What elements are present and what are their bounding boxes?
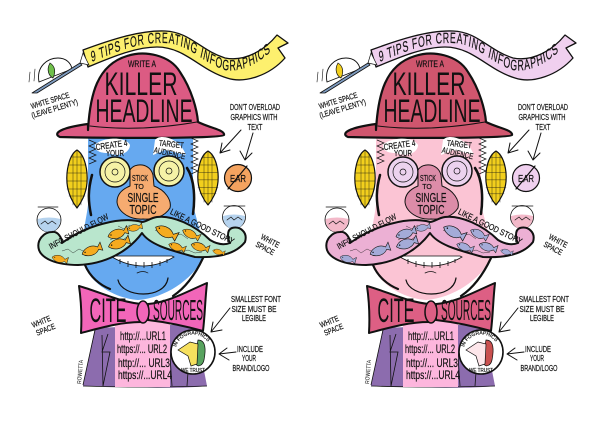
icon: flying saucer with alien — [29, 53, 89, 93]
note: include your brand/logo: BRAND/LOGO — [232, 363, 270, 373]
source URLs on shirt: http://... URL3 — [406, 356, 458, 370]
character: left full-colour version — [28, 30, 289, 388]
note: white space left: WHITE — [318, 314, 340, 330]
source URLs on shirt: https://...URL4 — [118, 368, 172, 382]
jacket — [371, 320, 495, 388]
eyebrow labels: YOUR — [394, 149, 412, 158]
note: include your brand/logo: YOUR — [242, 353, 256, 363]
note: white space left — [318, 314, 345, 338]
note: smallest font size: LEGIBLE — [242, 313, 266, 323]
source URLs on shirt: http://...URL1 — [120, 329, 166, 343]
moustache with fish — [326, 206, 534, 265]
hat text: write a killer headline: WRITE A — [128, 59, 156, 69]
note: include your brand/logo: INCLUDE — [525, 344, 551, 354]
arrow to badge — [211, 308, 230, 332]
nose: stick to single topic: STICK — [420, 174, 436, 183]
note: smallest font size: SIZE MUST BE — [232, 304, 277, 314]
source URLs on shirt: http://...URL1 — [408, 329, 454, 343]
source URLs on shirt: https://...URL4 — [406, 368, 460, 382]
arrow to logo — [219, 348, 236, 360]
badge: in infographics we trust: WE TRUST — [181, 368, 206, 374]
note: white space left: SPACE — [35, 322, 57, 338]
note: don't overload graphics with text — [230, 102, 280, 132]
crossed-out ear icon — [512, 164, 540, 192]
source URLs on shirt — [405, 329, 460, 382]
moustache with goldfish — [38, 206, 246, 265]
bow tie: cite sources — [367, 283, 495, 333]
source URLs on shirt — [117, 329, 172, 382]
bow tie: cite sources: CITE — [378, 292, 414, 330]
character: right pink version: SOURCES — [441, 295, 491, 327]
nose: stick to single topic: STICK — [132, 174, 148, 183]
note: don't overload graphics with text: TEXT — [536, 122, 550, 132]
icon: flying saucer with alien — [317, 53, 377, 93]
nose: stick to single topic: TO — [422, 184, 432, 191]
hat text: write a killer headline: KILLER — [392, 66, 466, 102]
note: include your brand/logo: INCLUDE — [237, 344, 263, 354]
note: include your brand/logo: BRAND/LOGO — [520, 363, 558, 373]
note: smallest font size: SIZE MUST BE — [520, 304, 565, 314]
face — [83, 135, 203, 300]
note: white space, leave plenty: (LEAVE PLENTY) — [30, 97, 79, 120]
moustache labels — [335, 206, 524, 251]
badge: in infographics we trust — [458, 329, 504, 375]
artist signature: ROWETTA — [365, 360, 373, 384]
corn ears — [67, 150, 218, 208]
note: white space, leave plenty — [316, 89, 367, 120]
eyebrow labels — [383, 137, 475, 161]
nose: stick to single topic: SINGLE — [128, 190, 159, 205]
note: white space right: SPACE — [254, 240, 276, 257]
arrow to logo — [507, 348, 524, 360]
arrows to ear — [220, 130, 253, 160]
note: white space right — [254, 232, 281, 258]
badge: in infographics we trust: IN FOGRAPHICS — [172, 330, 210, 347]
nose: stick to single topic: SINGLE — [416, 190, 447, 205]
eyebrow labels: TARGET — [446, 138, 472, 150]
source URLs on shirt: https://... URL2 — [405, 342, 455, 356]
note: white space left — [30, 314, 57, 338]
hat text: write a killer headline: HEADLINE — [96, 93, 192, 129]
badge: in infographics we trust — [170, 329, 216, 375]
bow tie: cite sources: CITE — [90, 292, 126, 330]
note: white space right — [542, 232, 569, 258]
note: include your brand/logo: YOUR — [530, 353, 544, 363]
crossed-out ear icon: EAR — [518, 174, 534, 185]
eyebrow labels: CREATE 4 — [95, 138, 128, 152]
moustache labels: LIKE A GOOD STORY — [169, 206, 236, 246]
crossed-out ear icon — [224, 164, 252, 192]
source URLs on shirt: http://... URL3 — [118, 356, 170, 370]
moustache labels: LIKE A GOOD STORY — [457, 206, 524, 246]
face — [371, 135, 491, 300]
moustache labels — [47, 206, 236, 251]
note: don't overload graphics with text: TEXT — [248, 122, 262, 132]
fishbowls — [325, 206, 534, 232]
hat text: write a killer headline: HEADLINE — [384, 93, 480, 129]
hat text: write a killer headline — [96, 59, 192, 129]
eyes — [388, 156, 472, 187]
badge: in infographics we trust: IN FOGRAPHICS — [460, 330, 498, 347]
eyebrow labels: AUDIENCE — [153, 145, 187, 161]
note: white space right: SPACE — [542, 240, 564, 257]
title banner: 9 TIPS FOR CREATING INFOGRAPHICS — [90, 32, 270, 71]
note: don't overload graphics with text: GRAPHICS WITH — [230, 112, 278, 122]
nose: stick to single topic: TO — [134, 184, 144, 191]
note: white space right: WHITE — [547, 232, 569, 250]
fishbowls — [37, 206, 246, 232]
note: don't overload graphics with text — [518, 102, 568, 132]
jacket — [83, 320, 207, 388]
corn ears — [355, 150, 506, 208]
note: don't overload graphics with text: DON'T OVERLOAD — [518, 102, 568, 112]
note: white space, leave plenty: WHITE SPACE — [30, 91, 71, 111]
note: smallest font size: SMALLEST FONT — [231, 294, 281, 304]
note: white space right: WHITE — [259, 232, 281, 250]
badge: in infographics we trust: WE TRUST — [469, 368, 494, 374]
eyebrow labels: AUDIENCE — [441, 145, 475, 161]
eyebrow labels: CREATE 4 — [383, 138, 416, 152]
nose: stick to single topic: TOPIC — [418, 202, 444, 217]
moustache labels: INFO SHOULD FLOW — [47, 211, 110, 251]
hat — [57, 54, 224, 138]
note: white space left: WHITE — [30, 314, 52, 330]
hat text: write a killer headline: KILLER — [104, 66, 178, 102]
source URLs on shirt: https://... URL2 — [117, 342, 167, 356]
note: smallest font size — [231, 294, 281, 323]
note: white space left: SPACE — [323, 322, 345, 338]
note: white space, leave plenty: (LEAVE PLENTY) — [318, 97, 367, 120]
eyes — [100, 156, 184, 187]
arrows to ear — [508, 130, 541, 160]
eyebrow labels: YOUR — [106, 149, 124, 158]
note: white space, leave plenty — [28, 89, 79, 120]
artist signature: ROWETTA — [77, 360, 85, 384]
nose: stick to single topic — [405, 165, 458, 219]
nose: stick to single topic: TOPIC — [130, 202, 156, 217]
eyebrow labels: TARGET — [158, 138, 184, 150]
moustache labels: INFO SHOULD FLOW — [335, 211, 398, 251]
note: smallest font size: LEGIBLE — [530, 313, 554, 323]
note: white space, leave plenty: WHITE SPACE — [318, 91, 359, 111]
nose: stick to single topic — [117, 165, 170, 219]
note: include your brand/logo — [520, 344, 558, 373]
eyebrow labels — [95, 137, 187, 161]
bow tie: cite sources — [79, 283, 207, 333]
hat text: write a killer headline — [384, 59, 480, 129]
note: smallest font size: SMALLEST FONT — [519, 294, 569, 304]
crossed-out ear icon: EAR — [230, 174, 246, 185]
character: left full-colour version: SOURCES — [153, 295, 203, 327]
teeth — [400, 256, 462, 268]
note: don't overload graphics with text: GRAPHICS WITH — [518, 112, 566, 122]
note: don't overload graphics with text: DON'T OVERLOAD — [230, 102, 280, 112]
title banner: 9 TIPS FOR CREATING INFOGRAPHICS — [378, 32, 558, 71]
teeth — [112, 256, 174, 268]
hat text: write a killer headline: WRITE A — [416, 59, 444, 69]
note: include your brand/logo — [232, 344, 270, 373]
note: smallest font size — [519, 294, 569, 323]
hat — [345, 54, 512, 138]
arrow to badge — [499, 308, 518, 332]
character: right pink version — [316, 30, 577, 388]
